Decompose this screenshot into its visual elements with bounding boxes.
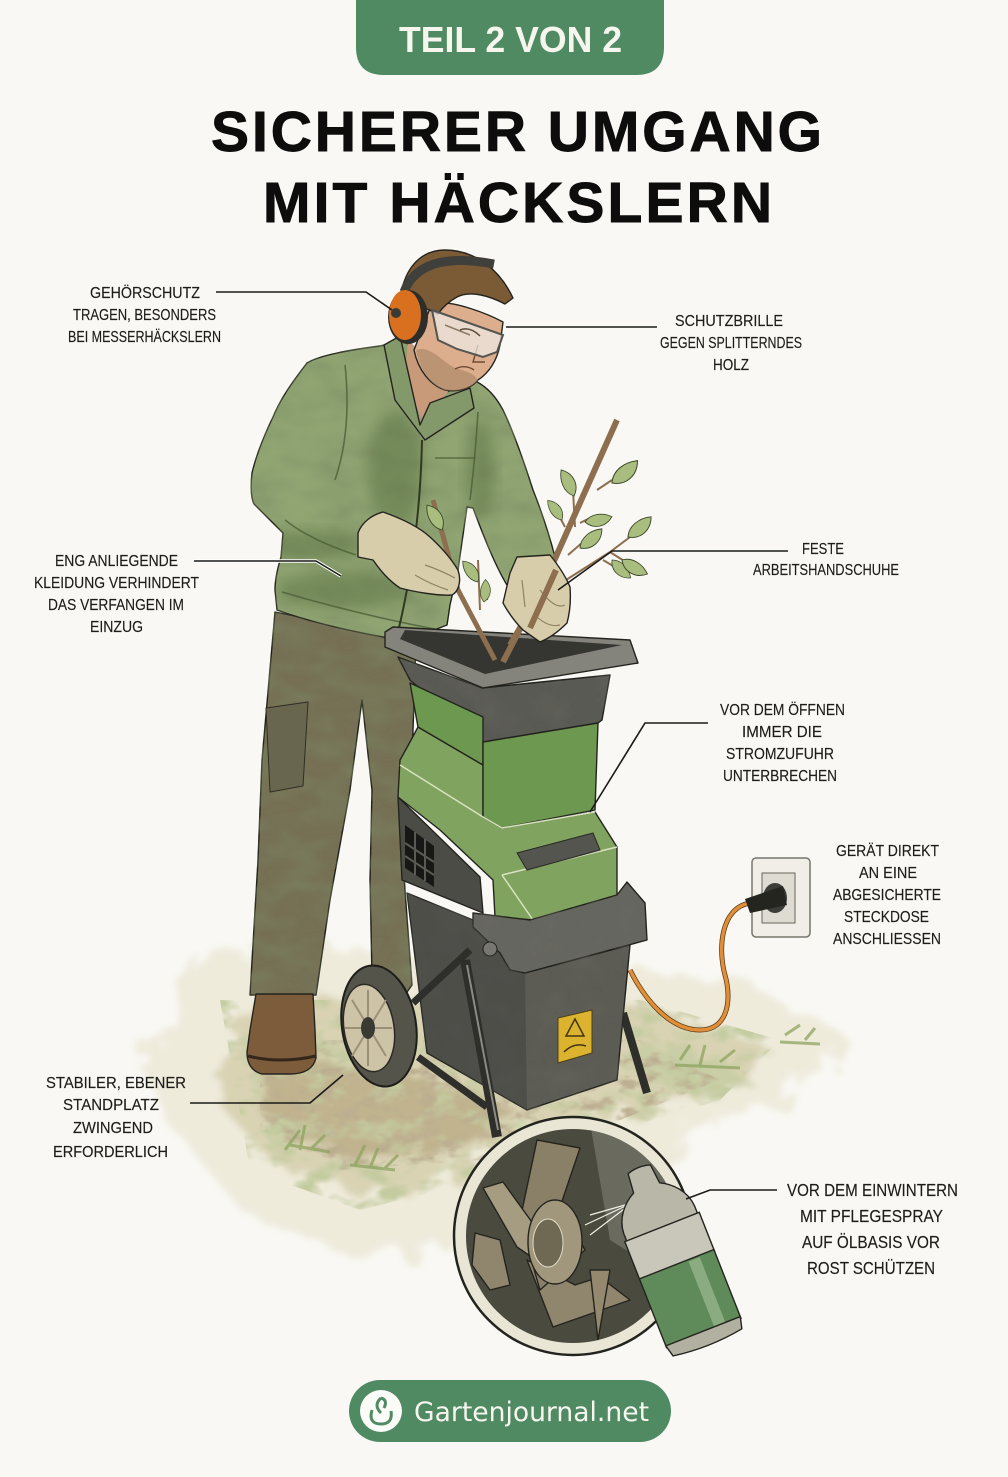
label: disconnect power: VOR DEM ÖFFNEN (720, 701, 845, 719)
hearing protection (388, 260, 494, 344)
neck (404, 340, 448, 420)
leaves (425, 459, 656, 603)
arm (482, 1181, 532, 1256)
illustration: man (247, 250, 555, 1074)
rear leg (623, 1013, 647, 1093)
label: fused socket: GERÄT DIREKT (836, 842, 939, 860)
goggles (432, 310, 503, 357)
jacket shading (250, 410, 494, 608)
title (211, 100, 822, 235)
label: close-fitting clothing: DAS VERFANGEN IM (48, 597, 184, 614)
label: fused socket: ABGESICHERTE (833, 887, 941, 904)
frame struts (413, 950, 487, 1107)
shirt (402, 378, 440, 438)
trousers (250, 612, 416, 1002)
lower bin (407, 893, 630, 1110)
right branch lower section (510, 565, 552, 645)
spray can (601, 1153, 746, 1360)
illustration: garden shredder (333, 627, 750, 1137)
label: work gloves (558, 541, 899, 590)
title: MIT HÄCKSLERN (263, 171, 772, 235)
hopper body (398, 657, 610, 742)
green front (483, 723, 598, 828)
label: stable level ground: ERFORDERLICH (53, 1144, 168, 1161)
label: work gloves: FESTE (802, 541, 844, 558)
upper blade (520, 1140, 585, 1290)
spray mist (584, 1204, 626, 1236)
hair (403, 250, 513, 314)
label: disconnect power: UNTERBRECHEN (723, 768, 837, 785)
inset: rotor maintenance (454, 1117, 746, 1360)
label: stable level ground: STABILER, EBENER (46, 1075, 186, 1092)
left branch (433, 500, 495, 660)
label: disconnect power: IMMER DIE (742, 724, 822, 741)
boot (247, 994, 316, 1074)
drum (472, 1233, 510, 1290)
green upper left (410, 683, 483, 765)
label: disconnect power: STROMZUFUHR (726, 746, 834, 763)
hopper rim (385, 627, 638, 688)
lower blade (527, 1260, 630, 1327)
mouth and nose (455, 345, 485, 370)
footer badge (349, 1380, 671, 1442)
label: winter care spray: VOR DEM EINWINTERN (787, 1180, 958, 1200)
label: close-fitting clothing: ENG ANLIEGENDE (55, 553, 178, 570)
illustration: branches and gloves (358, 420, 656, 662)
face (414, 303, 503, 391)
hub (528, 1200, 582, 1284)
label: close-fitting clothing: EINZUG (90, 619, 143, 636)
green highlights (400, 765, 617, 920)
ground patch (140, 935, 845, 1255)
vent grid (405, 825, 434, 887)
label: fused socket: STECKDOSE (844, 909, 929, 926)
label: fused socket (833, 842, 941, 948)
bolt (483, 942, 497, 956)
lower spike (590, 1270, 610, 1340)
cargo pocket (266, 702, 308, 792)
green lower body (398, 727, 617, 920)
label: safety goggles: HOLZ (713, 357, 749, 374)
label: winter care spray: MIT PFLEGESPRAY (800, 1206, 943, 1226)
hopper opening (400, 630, 622, 674)
label: stable level ground: STANDPLATZ (63, 1097, 159, 1114)
label: winter care spray: ROST SCHÜTZEN (807, 1258, 935, 1278)
wheel (333, 960, 425, 1092)
label: safety goggles (506, 313, 802, 374)
label: work gloves: ARBEITSHANDSCHUHE (753, 562, 899, 579)
collar (384, 336, 474, 440)
twigs (478, 480, 632, 610)
front leg (465, 960, 498, 1137)
label: safety goggles: SCHUTZBRILLE (675, 313, 783, 330)
inset ring (454, 1117, 692, 1355)
badge: part 2 of 2: TEIL 2 VON 2 (399, 19, 622, 60)
badge: part 2 of 2 (356, 0, 664, 75)
base collar (473, 882, 647, 973)
bin side shading (407, 893, 527, 1110)
label: fused socket: ANSCHLIESSEN (833, 931, 941, 948)
footer badge: Gartenjournal.net (414, 1397, 649, 1428)
label: hearing protection: GEHÖRSCHUTZ (90, 284, 200, 302)
sleeve creases (282, 365, 478, 630)
right glove (503, 555, 570, 642)
label: close-fitting clothing: KLEIDUNG VERHINDERT (34, 575, 199, 592)
jacket (251, 340, 555, 638)
left glove (358, 512, 460, 595)
right branch (503, 420, 617, 662)
ground speckle: green (220, 1000, 780, 1210)
label: hearing protection: TRAGEN, BESONDERS (73, 307, 216, 324)
warning label (558, 1010, 592, 1063)
label: hearing protection (68, 284, 392, 346)
label: close-fitting clothing (34, 553, 341, 636)
ground speckle: brown (260, 1040, 720, 1170)
label: winter care spray: AUF ÖLBASIS VOR (802, 1232, 940, 1252)
stubble (416, 349, 478, 391)
label: stable level ground (46, 1075, 343, 1161)
label: hearing protection: BEI MESSERHÄCKSLERN (68, 328, 221, 346)
label: disconnect power (590, 701, 845, 812)
dark vent housing (398, 797, 483, 913)
power cord (630, 903, 750, 1030)
label: fused socket: AN EINE (859, 865, 917, 882)
label: stable level ground: ZWINGEND (73, 1120, 153, 1137)
handle (517, 833, 600, 870)
grass tufts (285, 1025, 820, 1170)
icon: logo (360, 1390, 402, 1432)
zipper (398, 440, 422, 632)
title: SICHERER UMGANG (211, 100, 822, 164)
label: winter care spray (686, 1180, 958, 1278)
rotor view (466, 1129, 666, 1343)
label: safety goggles: GEGEN SPLITTERNDES (660, 335, 802, 352)
wall socket and plug (745, 858, 810, 937)
